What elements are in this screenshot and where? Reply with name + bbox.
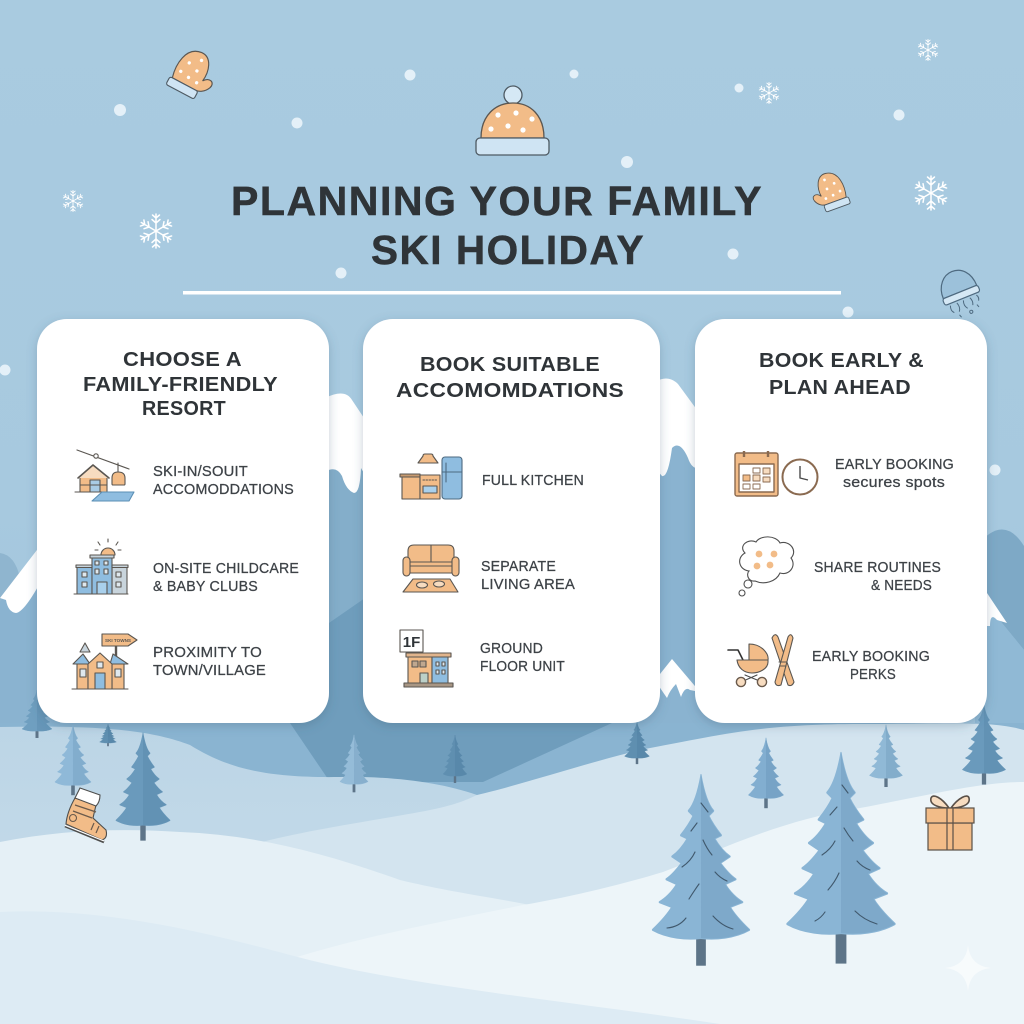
- title: SKI HOLIDAY: [371, 227, 645, 273]
- text: ski-in accommodations: SKI-IN/SOUIT: [153, 464, 248, 480]
- heading: choose a family-friendly resort: [83, 348, 278, 420]
- icon: house with signpost: SKI TOWNS: [105, 638, 131, 643]
- icon: childcare building: [74, 539, 128, 594]
- text: separate living area: [481, 559, 575, 593]
- heading: choose a family-friendly resort: FAMILY-FRIENDLY: [83, 373, 278, 396]
- icon: ground floor unit: [400, 630, 453, 687]
- title: [231, 178, 763, 273]
- text: on-site childcare: [153, 561, 299, 595]
- heading: book early and plan ahead: BOOK EARLY &: [759, 349, 924, 372]
- icon: thought cloud: [739, 537, 794, 596]
- panel: choose a family-friendly resort: [37, 319, 329, 723]
- text: separate living area: SEPARATE: [481, 559, 556, 575]
- snowflakes: [63, 39, 948, 248]
- text: on-site childcare: ON-SITE CHILDCARE: [153, 561, 299, 577]
- icon: calendar and clock: [735, 451, 818, 496]
- background trees: [22, 690, 1006, 841]
- snow hills: [0, 723, 1024, 1024]
- text: share routines and needs: SHARE ROUTINES: [814, 560, 941, 576]
- snow dots: [0, 70, 1000, 476]
- heading: book suitable accommodations: [396, 353, 624, 402]
- mountain snow caps: [0, 378, 1007, 698]
- text: ski-in accommodations: ACCOMODDATIONS: [153, 482, 294, 498]
- icon: ski boot: [65, 788, 106, 842]
- heading: book early and plan ahead: [759, 349, 924, 399]
- heading: book suitable accommodations: ACCOMOMDATIONS: [396, 379, 624, 402]
- icon: stroller and skis: [728, 635, 794, 687]
- icon: blue hat with fringe: [934, 264, 987, 322]
- sparkle: [945, 945, 991, 991]
- large tree right: [787, 753, 895, 964]
- text: proximity to town: PROXIMITY TO: [153, 645, 262, 661]
- panel: book suitable accommodations: [363, 319, 660, 723]
- text: on-site childcare: & BABY CLUBS: [153, 579, 258, 595]
- icon: mitten top left: [166, 45, 223, 104]
- text: proximity to town: TOWN/VILLAGE: [153, 663, 266, 679]
- text: share routines and needs: & NEEDS: [871, 578, 932, 594]
- title underline: [183, 291, 841, 294]
- heading: choose a family-friendly resort: CHOOSE A: [123, 348, 242, 371]
- text: proximity to town: [153, 645, 266, 679]
- icon: sofa and rug: [403, 545, 459, 592]
- heading: book early and plan ahead: PLAN AHEAD: [769, 376, 911, 399]
- text: ski-in accommodations: [153, 464, 294, 498]
- icon: full kitchen: [400, 454, 462, 499]
- panel: book early and plan ahead: [695, 319, 987, 723]
- text: ground floor unit: FLOOR UNIT: [480, 659, 565, 675]
- text: early booking secures spots: EARLY BOOKING: [835, 457, 954, 473]
- title: PLANNING YOUR FAMILY: [231, 178, 763, 224]
- text: ground floor unit: GROUND: [480, 641, 543, 657]
- icon: chalet and ski lift: [75, 450, 134, 501]
- icon: house with signpost: [72, 634, 137, 689]
- text: early booking perks: EARLY BOOKING: [812, 649, 930, 665]
- large tree left: [652, 775, 750, 966]
- text: separate living area: LIVING AREA: [481, 577, 575, 593]
- text: full kitchen: FULL KITCHEN: [482, 473, 584, 489]
- text: early booking secures spots: [835, 457, 954, 491]
- text: early booking perks: [812, 649, 930, 683]
- text: early booking perks: PERKS: [850, 667, 896, 683]
- heading: choose a family-friendly resort: RESORT: [142, 397, 226, 420]
- icon: mitten top right: [807, 169, 851, 215]
- icon: gift box: [926, 796, 974, 850]
- text: ground floor unit: [480, 641, 565, 675]
- icon: ground floor unit: 1F: [403, 634, 420, 651]
- text: early booking secures spots: secures spots: [843, 475, 945, 491]
- heading: book suitable accommodations: BOOK SUITABLE: [420, 353, 600, 376]
- icon: beanie hat: [476, 86, 549, 155]
- mountains: [0, 388, 1024, 800]
- text: share routines and needs: [814, 560, 941, 594]
